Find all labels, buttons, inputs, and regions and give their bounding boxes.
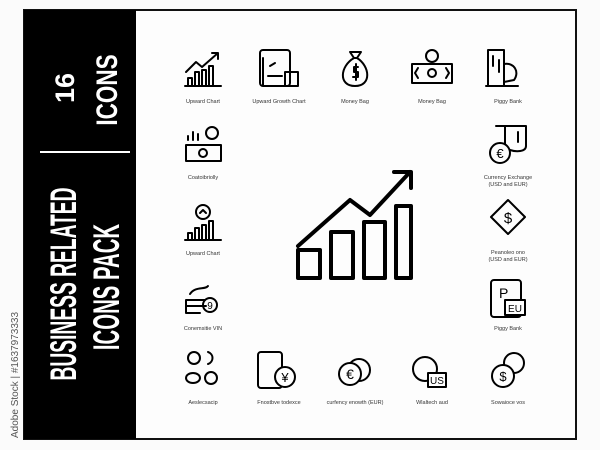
heading: 16: 16 [50,73,80,103]
icon: yen doc: ¥ [280,370,289,385]
labels: Piggy Bank [494,326,522,332]
icon: P EU card: EU [508,304,522,315]
labels: Fnostbve todexce [257,400,301,406]
labels: Wlaltech aud [416,400,448,406]
icon: euro coins: € [346,366,354,382]
icon: cost VIN: 9 [207,301,213,312]
watermark id: Adobe Stock | #1637973333 [10,312,21,438]
labels: curfency enowth (EUR) [327,400,384,406]
icon: upward chart 2 [185,205,221,240]
heading: ICONS: ICONS [90,54,124,126]
labels: Coatoibriolly [188,175,218,181]
icon: dollar coins [492,353,524,387]
sidebar [24,10,136,439]
labels: Aeslecsacip [188,400,218,406]
icon: currency exchange [490,126,526,163]
icon: currency exchange: € [496,146,504,161]
icon: P EU card: P [499,285,508,301]
labels: Currency Exchange [484,175,532,181]
icon: piggy bank [486,50,518,86]
icon: cost bill [186,127,221,161]
title: BUSINESS RELATED: BUSINESS RELATED [43,187,85,381]
icon: upward growth chart [260,50,298,86]
icon: money bag [343,52,367,86]
icon: euro coins [339,359,370,385]
icon: P EU card [491,280,525,317]
icon: US tag [413,357,446,387]
icon: diamond dollar: $ [504,210,513,227]
big chart [298,172,411,278]
labels: (USD and EUR) [488,182,528,188]
labels: Peanoleo ono [491,250,525,256]
icon: US tag: US [430,376,444,387]
labels: Sowaioce vos [491,400,525,406]
icon: diamond dollar [491,200,525,234]
labels: Money Bag [341,99,369,105]
icon: cost VIN [186,286,217,313]
icon: coins [186,352,217,384]
labels [184,99,532,406]
labels: Money Bag [418,99,446,105]
icon: money bill [412,50,452,83]
labels: Upward Chart [186,99,220,105]
title: ICONS PACK: ICONS PACK [87,224,128,350]
labels: (USD and EUR) [488,257,528,263]
icon: dollar coins: $ [499,369,507,384]
labels: Piggy Bank [494,99,522,105]
labels: Conemsitie VIN [184,326,222,332]
icon: upward chart [185,53,221,86]
icon: yen doc [258,352,295,388]
labels: Upward Growth Chart [252,99,306,105]
labels: Upward Chart [186,251,220,257]
